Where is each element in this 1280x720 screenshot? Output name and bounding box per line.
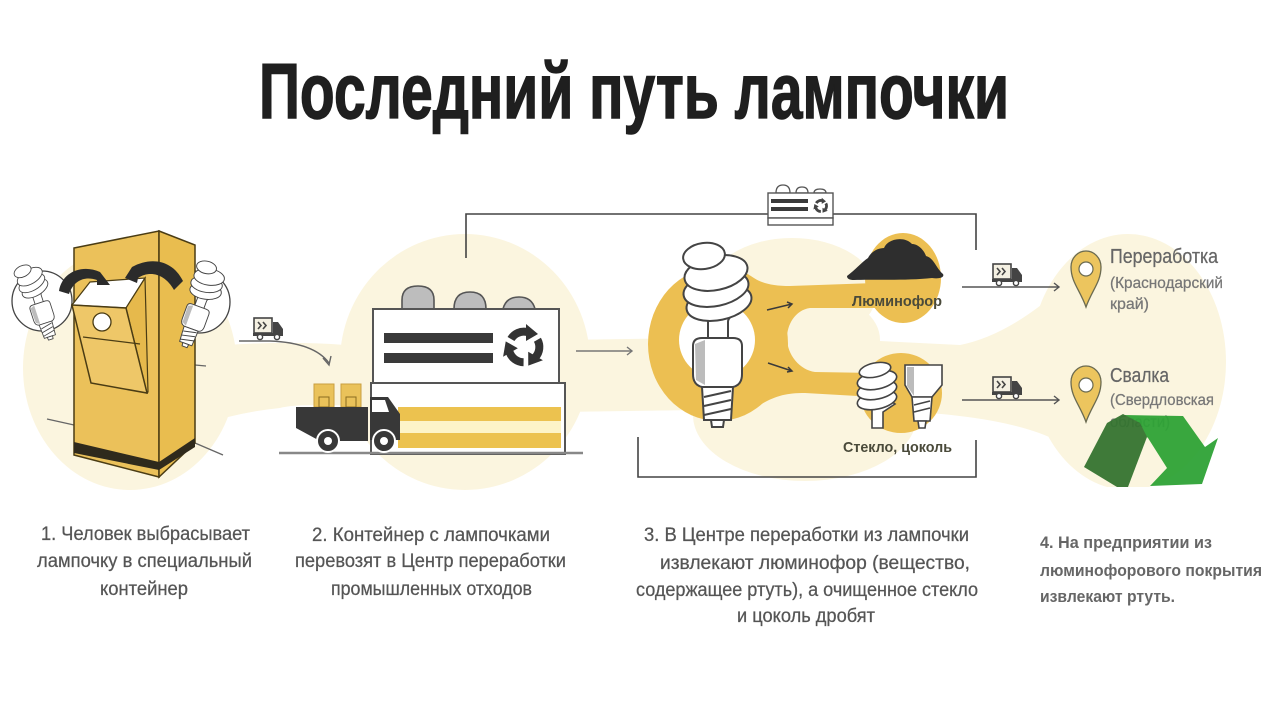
label: phosphor: Люминофор	[852, 293, 942, 310]
truck cargo boxes	[314, 384, 334, 407]
domes	[402, 286, 535, 309]
small factory icon	[768, 185, 833, 225]
label: glass and base: Стекло, цоколь	[843, 439, 952, 456]
destination text: landfill: (Свердловская	[1110, 392, 1214, 409]
destination text: landfill	[1110, 365, 1214, 431]
route to landfill	[962, 377, 1059, 404]
wheels	[317, 430, 339, 452]
caption 3: извлекают люминофор (вещество,	[660, 553, 970, 574]
route to processing	[962, 264, 1059, 291]
bulb circle right	[168, 271, 230, 333]
top and bottom process frame	[466, 214, 976, 477]
caption 2: промышленных отходов	[331, 579, 532, 600]
crushed base	[905, 365, 942, 428]
destination text: processing: (Краснодарский	[1110, 275, 1223, 292]
caption 4: люминофорового покрытия	[1040, 562, 1262, 580]
recycle sign	[497, 324, 550, 371]
destination text: landfill: Свалка	[1110, 365, 1170, 387]
opening	[72, 278, 145, 308]
bulb circle left	[12, 271, 72, 331]
truck body	[296, 407, 368, 441]
caption 2: перевозят в Центр переработки	[295, 551, 566, 572]
arrow right	[125, 261, 183, 290]
transport arrow step 1 to 2	[239, 318, 331, 365]
destination text: processing	[1110, 246, 1223, 313]
caption 4	[1040, 534, 1262, 606]
caption 1	[37, 524, 252, 600]
map pin: landfill	[1071, 366, 1101, 422]
flap side	[126, 278, 148, 393]
factory lower	[371, 383, 565, 454]
flap hole	[93, 313, 111, 331]
caption 2: 2. Контейнер с лампочками	[312, 525, 550, 546]
split arrows	[767, 302, 792, 372]
truck cab	[370, 397, 400, 440]
illustration: recycling container with bulbs	[11, 231, 232, 477]
caption 1: контейнер	[100, 579, 188, 600]
caption 2	[295, 525, 566, 600]
sign bars	[384, 333, 493, 343]
container black base	[74, 438, 195, 470]
destination text: processing: край)	[1110, 296, 1149, 313]
caption 3: содержащее ртуть), а очищенное стекло	[636, 580, 978, 601]
factory upper	[373, 309, 559, 383]
caption 3: и цоколь дробят	[737, 606, 875, 627]
green recycling arrow	[1084, 414, 1218, 487]
destination text: processing: Переработка	[1110, 246, 1219, 268]
wall lines	[47, 365, 223, 455]
crushed spiral	[856, 360, 898, 428]
map pin: processing	[1071, 251, 1101, 307]
caption 1: лампочку в специальный	[37, 551, 252, 572]
container side	[159, 231, 195, 477]
container front	[74, 231, 159, 477]
left bulb	[11, 258, 66, 344]
flap	[72, 305, 147, 393]
yellow process shape	[648, 233, 942, 433]
pale background blob	[23, 234, 1226, 490]
destination text: landfill: области)	[1110, 414, 1170, 431]
right bulb	[168, 256, 232, 353]
caption 1: 1. Человек выбрасывает	[41, 524, 250, 545]
caption 4: извлекают ртуть.	[1040, 588, 1175, 606]
caption 4: 4. На предприятии из	[1040, 534, 1212, 552]
title: Последний путь лампочки	[259, 47, 1009, 135]
caption 3	[636, 525, 978, 627]
arrow left	[59, 269, 110, 294]
ground	[279, 452, 583, 454]
caption 3: 3. В Центре переработки из лампочки	[644, 525, 969, 546]
factory with truck	[279, 286, 583, 454]
stripes	[398, 407, 561, 421]
phosphor pile	[847, 239, 943, 280]
main light bulb	[680, 240, 755, 427]
white mask below illustration	[1000, 487, 1280, 499]
arrow step 2 to 3	[576, 347, 632, 355]
